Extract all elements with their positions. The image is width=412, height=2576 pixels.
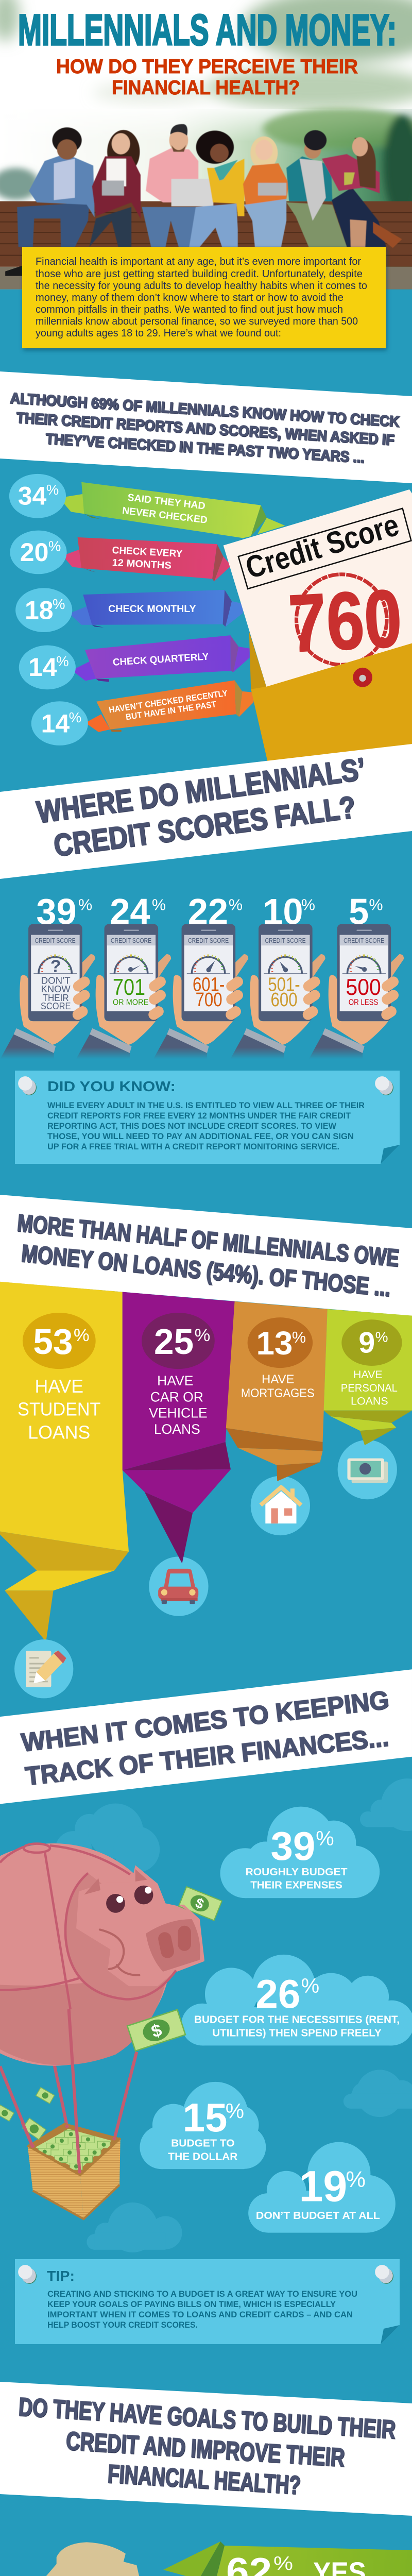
ribbon: 14% not recently: BUT HAVE IN THE PAST (125, 699, 217, 722)
loans banners chart (0, 1282, 412, 1642)
phone: 39% don't know: 39 (36, 891, 77, 931)
subtitle: HOW DO THEY PERCEIVE THEIR (56, 56, 358, 78)
cloud: 39% roughly budget: ROUGHLY BUDGET (246, 1867, 348, 1878)
intro text box: money, many of them don’t know where to start or how to avoid the (36, 292, 344, 303)
cloud: 15% to the dollar: 15 (183, 2095, 227, 2140)
credit score paper and envelope (224, 489, 412, 761)
heading band: credit checks (0, 371, 412, 483)
heading band: where do credit scores fall (0, 744, 412, 879)
banner: 13% mortgages: 13 (256, 1325, 293, 1362)
banner: 53% student loans: HAVE (35, 1376, 83, 1397)
tip note: budgeting: CREATING AND STICKING TO A BUDGET IS A GREAT WAY TO ENSURE YOU (47, 2290, 357, 2299)
icon: dollar in pig mouth (179, 1887, 222, 1921)
did you know note: CREDIT REPORTS FOR FREE EVERY 12 MONTHS UNDER THE FAIR CREDIT (47, 1111, 351, 1121)
intro text box: millennials know about personal finance, so we surveyed more than 500 (36, 316, 358, 327)
basket of cash (28, 2122, 121, 2219)
lower clouds and basket (0, 2009, 412, 2252)
credit check ribbons chart (9, 474, 412, 761)
banner: 25% car loans (123, 1292, 235, 1564)
tip note: budgeting: KEEP YOUR GOALS OF PAYING BILLS ON TIME, WHICH IS ESPECIALLY (47, 2300, 336, 2309)
icon: car (149, 1556, 209, 1616)
banner: 13% mortgages (226, 1301, 328, 1481)
intro text box: those who are just getting started building credit. Unfortunately, despite (36, 268, 363, 280)
heading band: finances (0, 1669, 412, 1804)
phone: 24% 701 or more: OR MORE (113, 998, 148, 1007)
banner: 25% car loans: 25 (154, 1321, 194, 1362)
phone: 10% 501-600 (230, 891, 325, 1059)
phone: 5% 500 or less: 500 (346, 974, 381, 1000)
ribbon: 18% monthly (15, 588, 243, 632)
phone: 39% don't know: SCORE (41, 1001, 71, 1011)
banner: 53% student loans: 53 (33, 1321, 73, 1362)
ribbon: 20% every 12 months: 12 MONTHS (112, 557, 171, 571)
ribbon: 18% monthly: % (53, 596, 65, 612)
tip note: budgeting: IMPORTANT WHEN IT COMES TO LOANS AND CREDIT CARDS – AND CAN (47, 2310, 353, 2319)
icon: notepad and pencil (14, 1639, 73, 1698)
phone: 10% 501-600: CREDIT SCORE (265, 937, 306, 944)
icon: large dollar note (127, 2010, 185, 2051)
phone: 39% don't know: DON’T (41, 975, 71, 986)
money bag with stethoscope (8, 2542, 192, 2576)
phone: 24% 701 or more: 24 (110, 891, 150, 931)
banner: 9% personal loans: 9 (358, 1327, 375, 1360)
phone: 5% 500 or less: % (369, 896, 383, 913)
tip note: budgeting: HELP BOOST YOUR CREDIT SCORES. (47, 2320, 198, 2330)
ribbon: 34% never checked: 34 (18, 482, 46, 511)
ribbon: 20% every 12 months (10, 531, 231, 582)
phone: 10% 501-600: % (301, 896, 315, 913)
cloud: 15% to the dollar: % (226, 2099, 244, 2123)
banner: 9% personal loans: PERSONAL (341, 1382, 398, 1394)
ribbon: 20% every 12 months: % (48, 538, 61, 554)
heading band: goals: FINANCIAL HEALTH? (107, 2459, 301, 2500)
cloud: 19% don't budget (248, 2142, 396, 2233)
rope: centre (69, 2009, 80, 2172)
phone: 39% don't know: THEIR (43, 992, 69, 1003)
intro text box: the necessity for young adults to develop healthy habits when it comes to (36, 280, 367, 292)
phone: 24% 701 or more: 701 (113, 974, 145, 1000)
ribbon: 18% monthly: 18 (25, 596, 54, 625)
banner: 13% mortgages: MORTGAGES (241, 1386, 315, 1400)
ribbon: 14% quarterly: 14 (28, 653, 57, 682)
phone: 39% don't know (0, 891, 95, 1059)
ribbon: 34% never checked: NEVER CHECKED (122, 505, 208, 526)
phone: 24% 701 or more: CREDIT SCORE (111, 937, 151, 944)
tip note: budgeting (15, 2259, 400, 2344)
icon: house (251, 1476, 310, 1535)
phone: 10% 501-600: 10 (263, 891, 303, 931)
banner: 25% car loans: LOANS (154, 1421, 200, 1437)
cloud: 26% budget for necessities: UTILITIES) THEN SPEND FREELY (212, 2028, 382, 2039)
icon: cash (338, 1440, 397, 1499)
icon: large dollar note: $ (149, 2021, 164, 2042)
banner: 53% student loans (0, 1282, 129, 1642)
icon: falling dollars (0, 2088, 55, 2147)
banner: 9% personal loans (324, 1309, 412, 1445)
cloud: 15% to the dollar (140, 2082, 266, 2169)
intro text box (22, 247, 386, 348)
icon: dollar in pig mouth: $ (193, 1895, 206, 1912)
arrow: 62% yes (163, 2541, 412, 2576)
cloud: 19% don't budget: 19 (299, 2162, 347, 2210)
phone: 10% 501-600: 600 (271, 989, 298, 1010)
cloud: 26% budget for necessities: BUDGET FOR THE NECESSITIES (RENT, (194, 2014, 400, 2026)
foliage backdrop (0, 0, 412, 109)
goals arrows chart (163, 2541, 412, 2576)
ribbon: 14% quarterly: % (56, 653, 69, 669)
faint clouds (87, 2070, 412, 2252)
did you know note: THOSE, YOU WILL NEED TO PAY AN ADDITIONAL FEE, OR YOU CAN SIGN (47, 1131, 354, 1141)
cloud: 39% roughly budget: THEIR EXPENSES (250, 1879, 342, 1891)
phone: 39% don't know: CREDIT SCORE (35, 937, 76, 944)
banner: 53% student loans: % (74, 1326, 90, 1345)
budget section: balloon pig and clouds (0, 1639, 412, 2147)
phone: 5% 500 or less: CREDIT SCORE (344, 937, 384, 944)
ribbon: 14% not recently (31, 680, 253, 745)
subtitle (56, 56, 358, 99)
did you know note: WHILE EVERY ADULT IN THE U.S. IS ENTITLED TO VIEW ALL THREE OF THEIR (47, 1100, 365, 1110)
cloud: 26% budget for necessities (181, 1955, 412, 2045)
cloud: 15% to the dollar: BUDGET TO (171, 2138, 235, 2149)
heading band: where do credit scores fall: CREDIT SCORES FALL? (52, 789, 357, 863)
banner: 25% car loans: % (195, 1326, 210, 1345)
banner: 9% personal loans: LOANS (351, 1395, 388, 1408)
piggy bank balloon (0, 1843, 204, 2066)
ribbon: 14% not recently: HAVEN’T CHECKED RECENTLY (108, 688, 228, 715)
did you know note: REPORTING ACT, THIS DOES NOT INCLUDE CREDIT SCORES. TO VIEW (47, 1121, 337, 1131)
phone: 5% 500 or less: 5 (349, 891, 369, 931)
cloud: 15% to the dollar: THE DOLLAR (168, 2151, 238, 2162)
banner: 25% car loans: CAR OR (150, 1389, 203, 1404)
banner: 9% personal loans: % (375, 1329, 388, 1345)
phone: 5% 500 or less (308, 891, 404, 1059)
header panel (0, 0, 412, 110)
phone: 24% 701 or more: % (152, 896, 166, 913)
cloud: 39% roughly budget: 39 (271, 1823, 315, 1869)
did you know note (15, 1071, 400, 1164)
tip note: budgeting: TIP: (47, 2268, 75, 2284)
phone: 22% 601-700: 601- (193, 973, 225, 995)
ribbon: 14% not recently: % (69, 709, 81, 725)
photo: group of young adults on bench (0, 108, 412, 290)
cloud: 39% roughly budget (220, 1807, 380, 1898)
cloud: 39% roughly budget: % (316, 1827, 334, 1850)
faint clouds (55, 1778, 412, 1873)
banner: 25% car loans: HAVE (157, 1373, 193, 1388)
did you know note: UP FOR A FREE TRIAL WITH A CREDIT REPORT MONITORING SERVICE. (47, 1142, 339, 1151)
intro text box: common pitfalls in their paths. We wanted to find out just how much (36, 304, 343, 315)
heading band: loans (0, 1195, 412, 1316)
phone: 22% 601-700: CREDIT SCORE (188, 937, 229, 944)
phones chart: credit score ranges (0, 891, 404, 1059)
phone: 10% 501-600: 501- (268, 973, 300, 995)
ribbon: 34% never checked: % (46, 482, 59, 498)
banner: 25% car loans: VEHICLE (149, 1405, 208, 1421)
ribbon: 20% every 12 months: CHECK EVERY (112, 545, 183, 560)
banner: 53% student loans: LOANS (28, 1422, 90, 1443)
phone: 39% don't know: ? (50, 957, 61, 976)
cloud: 26% budget for necessities: % (301, 1975, 319, 1997)
banner: 13% mortgages: HAVE (262, 1372, 295, 1386)
phone: 22% 601-700: 700 (196, 989, 222, 1010)
heading band: credit checks: THEY’VE CHECKED IN THE PAST TWO YEARS ... (45, 431, 365, 466)
arrow: 62% yes: % (273, 2553, 293, 2574)
intro text box: young adults ages 18 to 29. Here’s what we found out: (36, 328, 281, 339)
phone: 22% 601-700: 22 (188, 891, 228, 931)
phone: 22% 601-700: % (229, 896, 243, 913)
phone: 24% 701 or more (76, 891, 171, 1059)
cloud: 19% don't budget: DON’T BUDGET AT ALL (256, 2210, 380, 2222)
ribbon: 18% monthly: CHECK MONTHLY (108, 603, 196, 615)
banner: 9% personal loans: HAVE (353, 1368, 383, 1381)
ribbon: 34% never checked: SAID THEY HAD (127, 492, 206, 512)
ribbon: 14% not recently: 14 (41, 709, 70, 738)
phone: 5% 500 or less: OR LESS (349, 998, 378, 1007)
phone: 39% don't know: KNOW (41, 984, 71, 994)
balloon ropes (0, 2052, 136, 2147)
intro text box: Financial health is important at any age, but it’s even more important for (36, 256, 361, 267)
heading band: finances: WHEN IT COMES TO KEEPING (20, 1685, 390, 1757)
cloud: 26% budget for necessities: 26 (255, 1971, 300, 2016)
banner: 53% student loans: STUDENT (18, 1399, 100, 1419)
heading band: goals (0, 2382, 412, 2516)
phone: 22% 601-700 (153, 891, 248, 1059)
phone: 39% don't know: % (78, 896, 92, 913)
ribbon: 34% never checked (9, 474, 285, 538)
did you know note: DID YOU KNOW: (47, 1078, 176, 1094)
ribbon: 20% every 12 months: 20 (20, 538, 48, 567)
banner: 13% mortgages: % (292, 1329, 306, 1346)
cloud: 19% don't budget: % (346, 2167, 366, 2192)
heading band: finances: TRACK OF THEIR FINANCES... (24, 1722, 390, 1791)
ribbon: 14% quarterly: CHECK QUARTERLY (112, 651, 209, 668)
subtitle: FINANCIAL HEALTH? (112, 77, 300, 99)
ribbon: 14% quarterly (19, 635, 250, 689)
